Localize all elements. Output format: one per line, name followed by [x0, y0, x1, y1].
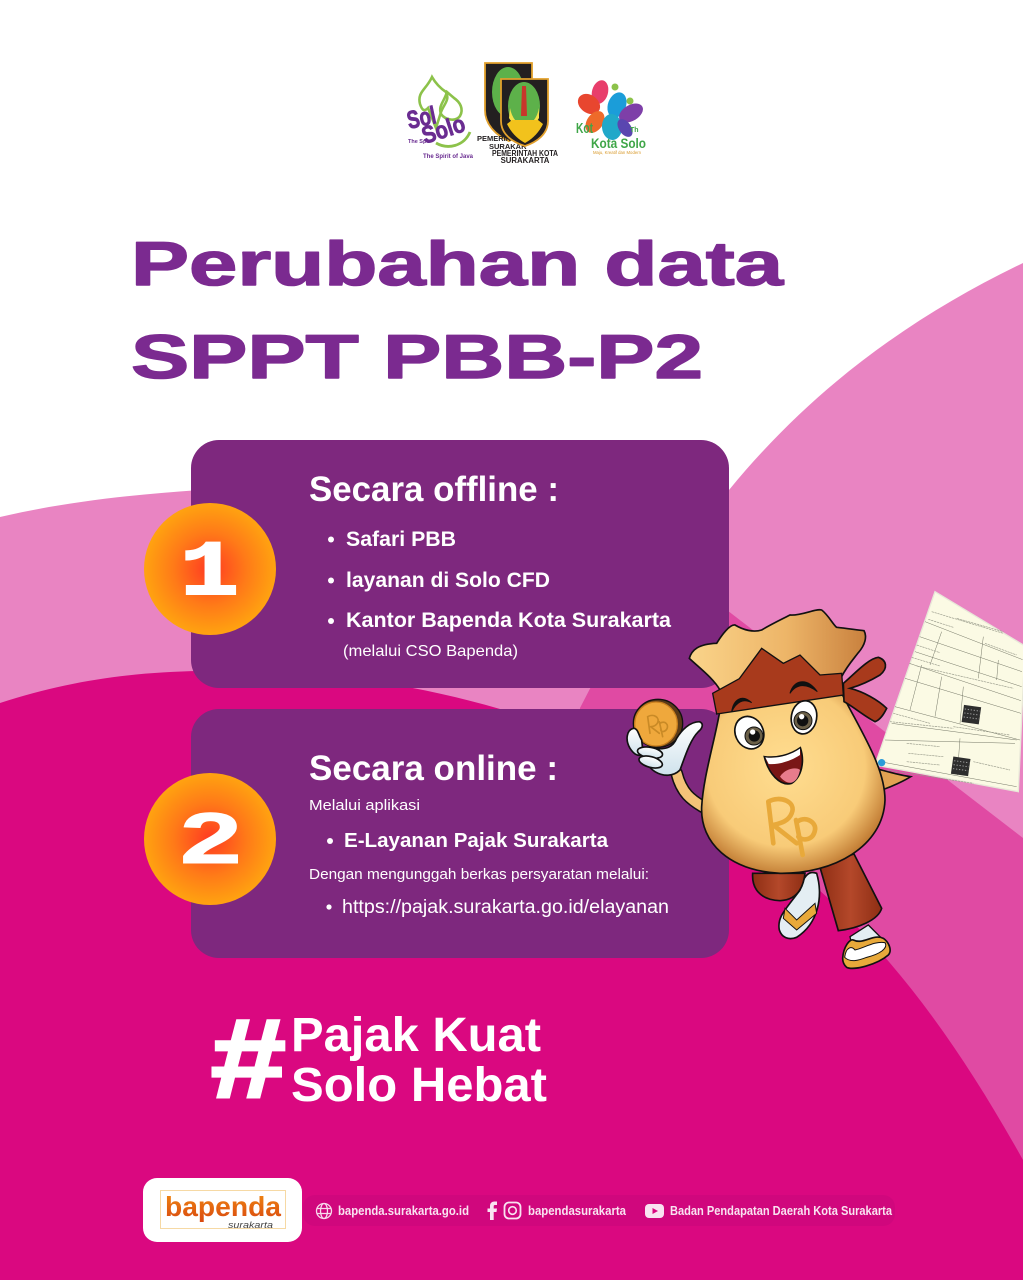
- list: offline channels: layanan di Solo CFD: [346, 568, 550, 592]
- logo: Kota Solo anniversary flower: [574, 78, 646, 155]
- number badge 2: 2: [180, 799, 242, 879]
- money bag body: [702, 690, 885, 873]
- heading: secara online: Secara online :: [309, 749, 558, 788]
- title: [131, 230, 784, 392]
- logo: Solo The Spirit of Java: The Spirit of Java: [423, 154, 474, 160]
- list: offline channels: (melalui CSO Bapenda): [343, 643, 518, 660]
- logo: Solo The Spirit of Java: The Sp: [408, 139, 427, 145]
- logo: crest of Pemerintah Kota Surakarta: [477, 63, 558, 165]
- hashtag: #: [209, 996, 285, 1121]
- hashtag: Pajak Kuat: [291, 1009, 541, 1062]
- text: online instructions: Dengan mengunggah berkas persyaratan melalui:: [309, 866, 649, 883]
- bapenda logo card: surakarta: [228, 1220, 273, 1230]
- text: online instructions: [309, 797, 669, 918]
- hashtag: [209, 996, 547, 1121]
- text: online instructions: https://pajak.surakarta.go.id/elayanan: [342, 897, 669, 918]
- logo: Solo The Spirit of Java: Sol: [404, 101, 439, 135]
- website: bapenda.surakarta.go.id: [338, 1203, 469, 1218]
- background: deep magenta shape: [0, 671, 1023, 1280]
- right arm: [868, 767, 911, 793]
- document: SPPT sheet: [875, 592, 1023, 792]
- mascot with coin and tax document: [627, 592, 1023, 968]
- text: online instructions: Melalui aplikasi: [309, 797, 420, 814]
- logo: crest of Pemerintah Kota Surakarta: PEMERINTAH KOTA: [492, 149, 558, 158]
- footer: [143, 1178, 895, 1242]
- list: offline channels: Kantor Bapenda Kota Surakarta: [346, 608, 672, 632]
- logo: Kota Solo anniversary flower: Maju, Kreatif dan Modern: [593, 150, 641, 155]
- glove: [627, 722, 702, 775]
- background: light pink shapes: [0, 263, 1023, 1280]
- list: offline channels: [328, 527, 672, 660]
- logo: Solo The Spirit of Java: Solo: [419, 110, 469, 150]
- social handle: bapendasurakarta: [528, 1203, 627, 1218]
- footer shadow band: [303, 1195, 895, 1226]
- mouth: [764, 748, 802, 784]
- logo: Solo The Spirit of Java: [404, 77, 474, 160]
- belly Rp mark: [768, 799, 815, 855]
- heading: secara offline: Secara offline :: [309, 470, 559, 509]
- bag ruffle: [689, 610, 866, 690]
- bapenda logo card: bapenda: [165, 1191, 281, 1222]
- logo: crest of Pemerintah Kota Surakarta: SURAKAR: [489, 142, 527, 151]
- title: SPPT PBB-P2: [131, 323, 703, 392]
- number badge 1: [144, 503, 276, 635]
- logo: Kota Solo anniversary flower: Kota Solo: [591, 135, 646, 151]
- number badge 1: 1: [180, 530, 239, 618]
- logo: crest of Pemerintah Kota Surakarta: SURAKARTA: [501, 156, 550, 165]
- bapenda logo card: [143, 1178, 302, 1242]
- logo: Kota Solo anniversary flower: Kot: [576, 120, 593, 137]
- logo: Kota Solo anniversary flower: Th: [630, 127, 639, 134]
- left arm: [677, 773, 703, 807]
- left leg and sandal: [753, 872, 819, 939]
- right leg and sandal: [819, 854, 890, 968]
- social handle: [488, 1202, 627, 1220]
- headband: [713, 648, 887, 722]
- logos row: [404, 63, 646, 165]
- coin: [633, 699, 683, 747]
- panel: secara online: [191, 709, 729, 958]
- title: Perubahan data: [131, 230, 784, 299]
- list: offline channels: Safari PBB: [346, 527, 456, 551]
- text: online instructions: E-Layanan Pajak Surakarta: [344, 829, 609, 852]
- background: medium pink shape: [560, 557, 1023, 1280]
- eyes and brows: [730, 682, 819, 754]
- youtube channel: Badan Pendapatan Daerah Kota Surakarta: [670, 1203, 893, 1218]
- hashtag: Solo Hebat: [291, 1059, 547, 1112]
- logo: crest of Pemerintah Kota Surakarta: PEMERIN: [477, 134, 511, 143]
- number badge 2: [144, 773, 276, 905]
- panel: secara offline: [191, 440, 729, 688]
